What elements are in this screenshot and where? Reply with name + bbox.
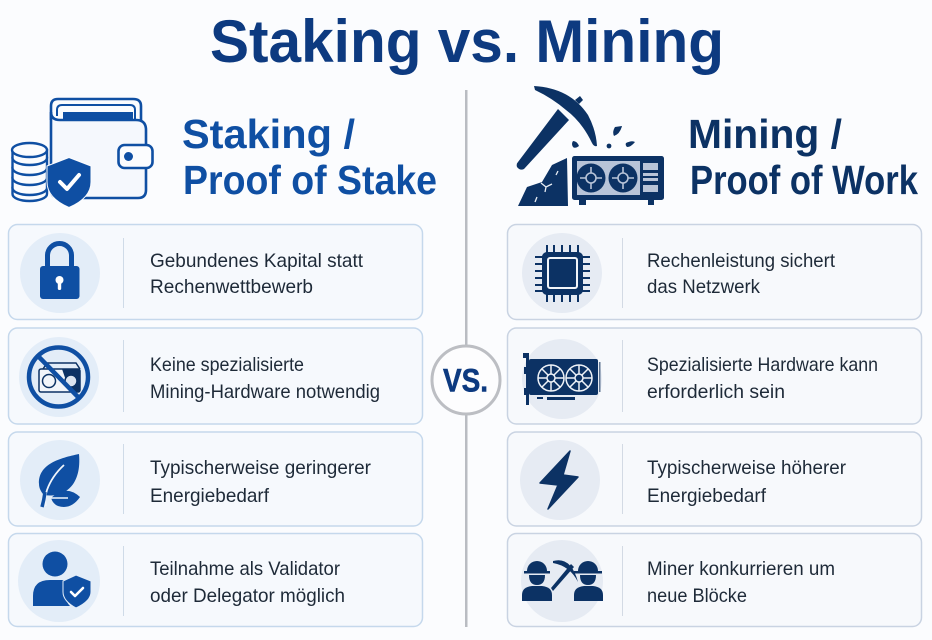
panel: staking row 2 — [8, 328, 422, 424]
panel: mining row 2 — [508, 328, 922, 424]
text — [647, 250, 836, 298]
title: Staking vs. Mining — [210, 8, 724, 75]
text: Miner konkurrieren um — [647, 558, 835, 580]
panel: mining row 1 — [508, 224, 922, 320]
center divider line — [465, 90, 468, 627]
heading: staking: Staking / — [182, 111, 355, 157]
text: Mining-Hardware notwendig — [150, 381, 380, 403]
text: Energiebedarf — [647, 485, 767, 507]
icon: pickaxe and mining rig — [517, 86, 664, 206]
text: erforderlich sein — [647, 381, 785, 403]
shield — [47, 158, 91, 208]
text: Teilnahme als Validator — [150, 558, 340, 580]
text: oder Delegator möglich — [150, 585, 345, 607]
text — [647, 558, 835, 607]
text: Rechenwettbewerb — [150, 276, 313, 298]
miner box — [572, 156, 664, 200]
text: Rechenleistung sichert — [647, 250, 836, 272]
icon: padlock — [40, 244, 80, 299]
vs badge: VS. — [443, 362, 488, 398]
text — [150, 558, 345, 607]
text: das Netzwerk — [647, 276, 760, 298]
icon: cpu chip — [535, 245, 590, 302]
icon: leaf — [39, 454, 80, 507]
heading: staking — [182, 111, 437, 203]
coin stack — [12, 143, 47, 201]
text — [647, 457, 846, 507]
text: Energiebedarf — [150, 485, 270, 507]
text — [150, 457, 371, 507]
panel: staking row 4 — [8, 534, 422, 626]
heading: mining: Mining / — [688, 111, 842, 157]
text: Keine spezialisierte — [150, 354, 304, 376]
text: Gebundenes Kapital statt — [150, 250, 364, 272]
panel: staking row 3 — [8, 432, 422, 526]
panel: staking row 1 — [8, 224, 422, 320]
vs badge — [432, 346, 500, 414]
text: Spezialisierte Hardware kann — [647, 354, 878, 376]
icon: validator with shield — [33, 552, 91, 608]
rock pile — [518, 158, 568, 206]
heading: staking: Proof of Stake — [183, 157, 437, 203]
text — [150, 250, 364, 298]
text: Typischerweise geringerer — [150, 457, 371, 479]
panel: mining row 4 — [508, 534, 922, 626]
heading: mining — [688, 111, 918, 203]
text — [647, 354, 878, 403]
icon: wallet with coins and shield — [12, 99, 152, 208]
icon: lightning bolt — [540, 451, 578, 509]
icon: no mining hardware — [29, 348, 88, 406]
text — [150, 354, 380, 403]
icon: miners with pickaxe — [522, 560, 603, 601]
icon: graphics card — [523, 353, 600, 405]
text: Typischerweise höherer — [647, 457, 846, 479]
text: neue Blöcke — [647, 585, 747, 607]
panel: mining row 3 — [508, 432, 922, 526]
